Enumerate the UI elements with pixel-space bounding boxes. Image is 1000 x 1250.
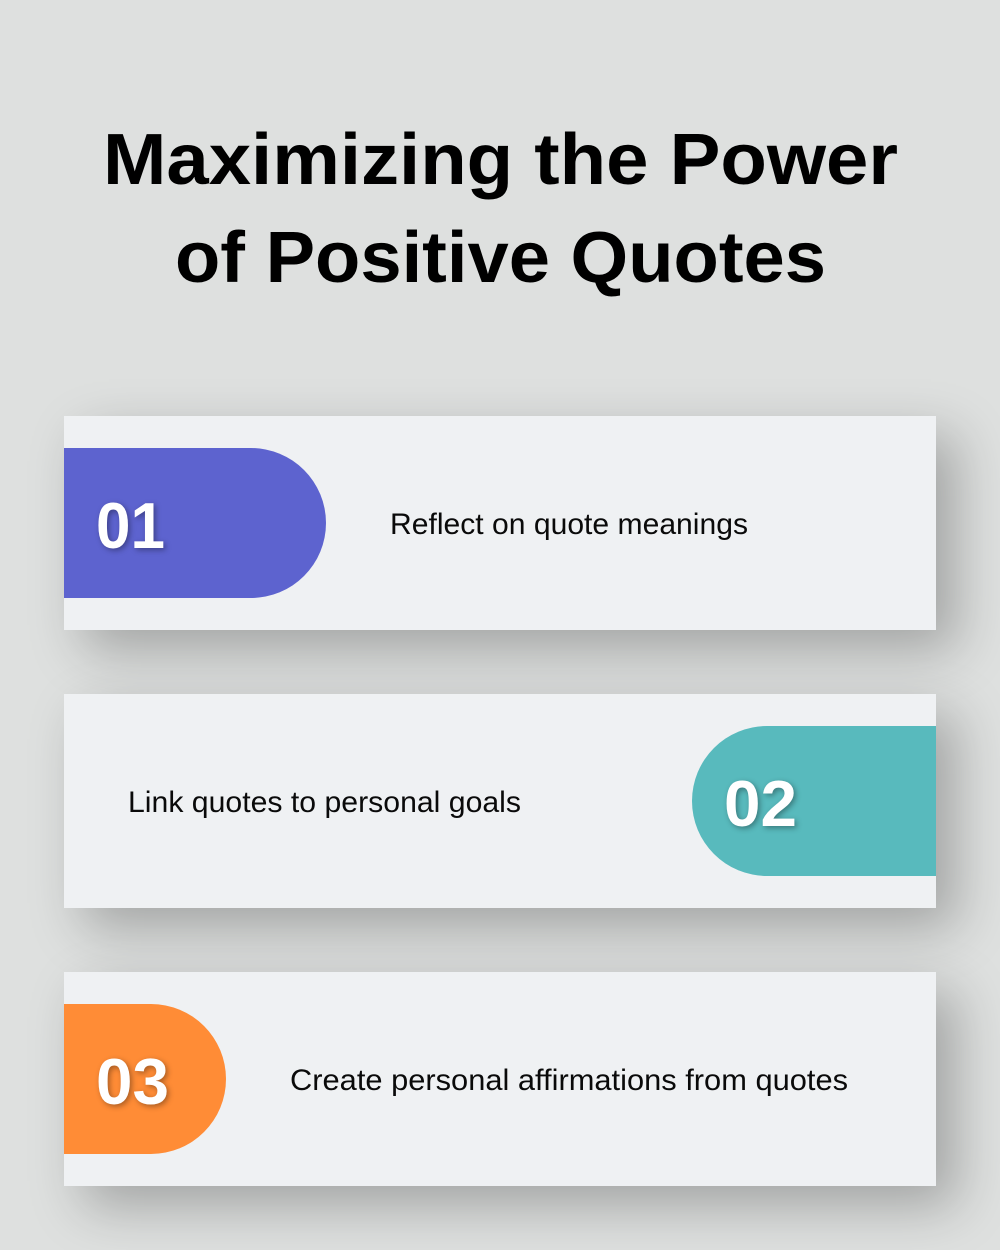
title	[103, 120, 898, 298]
title: of Positive Quotes	[175, 218, 826, 298]
text: link quotes: Link quotes to personal goals	[128, 786, 521, 819]
step 2: badge and text	[128, 726, 936, 876]
step 1: badge and text	[64, 448, 748, 598]
badge 03	[64, 1004, 226, 1154]
number 02: 02	[724, 767, 797, 840]
number 03: 03	[96, 1045, 169, 1118]
text: reflect: Reflect on quote meanings	[390, 508, 748, 541]
step 3: badge and text	[64, 1004, 848, 1154]
text: create affirmations: Create personal affirmations from quotes	[290, 1064, 848, 1097]
badge 02	[692, 726, 936, 876]
title: Maximizing the Power	[103, 120, 898, 200]
panel: step 2 card	[64, 694, 936, 908]
number 01: 01	[96, 489, 165, 562]
panel: step 1 card	[64, 416, 936, 630]
badge 01	[64, 448, 326, 598]
panel: step 3 card	[64, 972, 936, 1186]
